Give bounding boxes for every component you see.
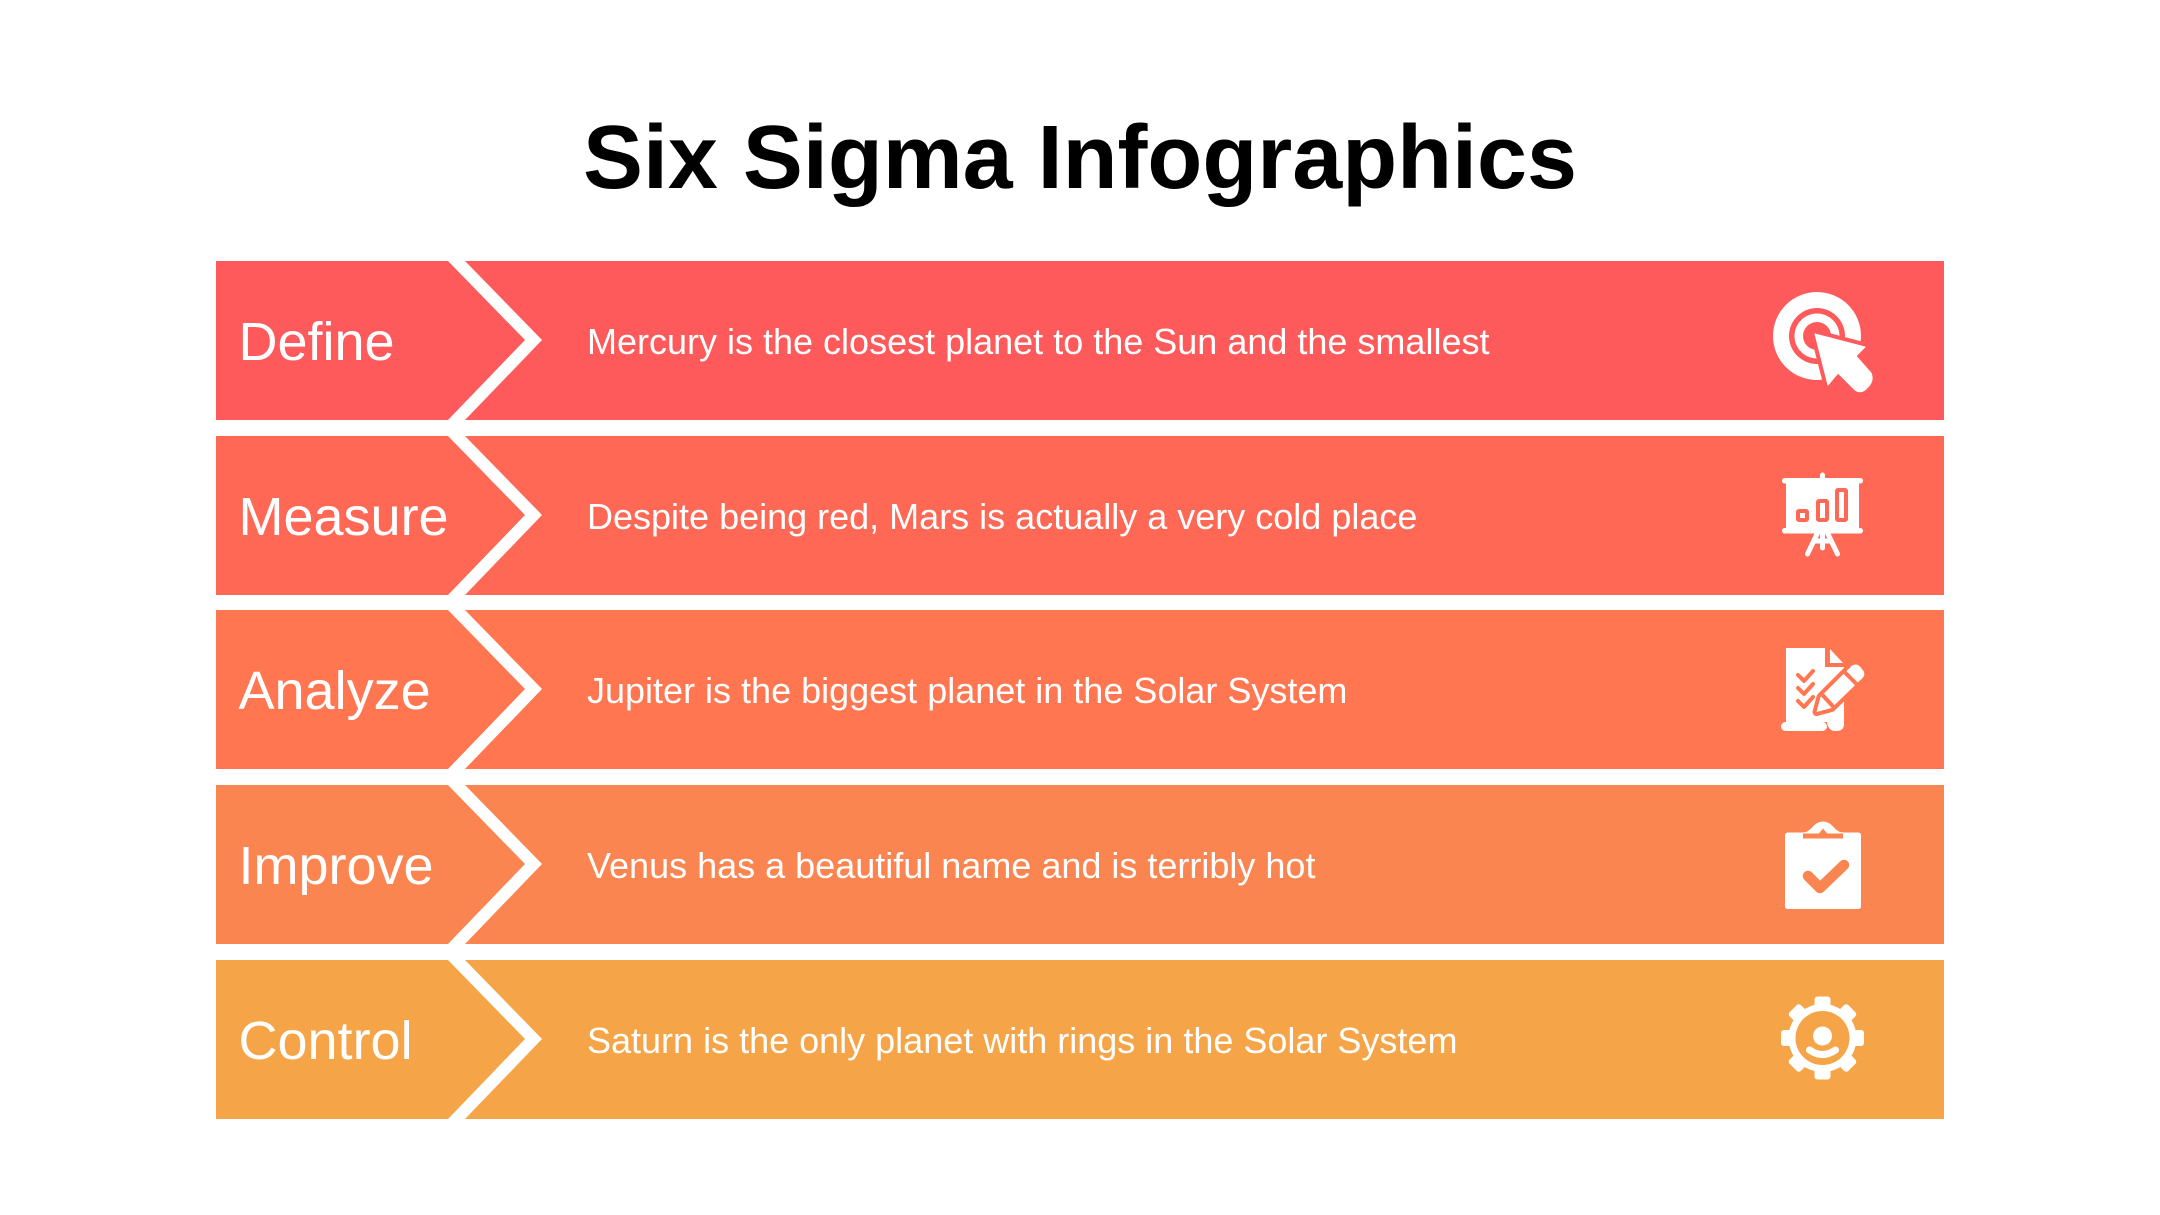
icon: gear with person [1781, 996, 1864, 1080]
icon: clipboard with check [1785, 822, 1861, 909]
title: Six Sigma Infographics [583, 108, 1577, 208]
label: define: Define [238, 312, 395, 372]
chevron: measure [448, 436, 542, 595]
panel: improve [216, 785, 1944, 944]
text: improve: Venus has a beautiful name and is terribly hot [587, 845, 1315, 886]
chevron: analyze [448, 610, 542, 769]
panel: analyze [216, 610, 1944, 769]
icon: checklist with pencil [1781, 648, 1864, 731]
text: define: Mercury is the closest planet to the Sun and the smallest [587, 321, 1489, 362]
chevron: control [448, 960, 542, 1119]
label: control: Control [238, 1011, 413, 1071]
panel: control [216, 960, 1944, 1119]
panel: measure [216, 436, 1944, 595]
icon: target with cursor [1773, 292, 1872, 392]
label: analyze: Analyze [238, 661, 431, 721]
icon: presentation board [1782, 475, 1863, 554]
text: measure: Despite being red, Mars is actually a very cold place [587, 496, 1417, 537]
text: analyze: Jupiter is the biggest planet in the Solar System [587, 670, 1347, 711]
text: control: Saturn is the only planet with rings in the Solar System [587, 1020, 1457, 1061]
chevron: improve [448, 785, 542, 944]
label: measure: Measure [238, 487, 449, 547]
label: improve: Improve [238, 836, 434, 896]
panel: define [216, 261, 1944, 420]
chevron: define [448, 261, 542, 420]
